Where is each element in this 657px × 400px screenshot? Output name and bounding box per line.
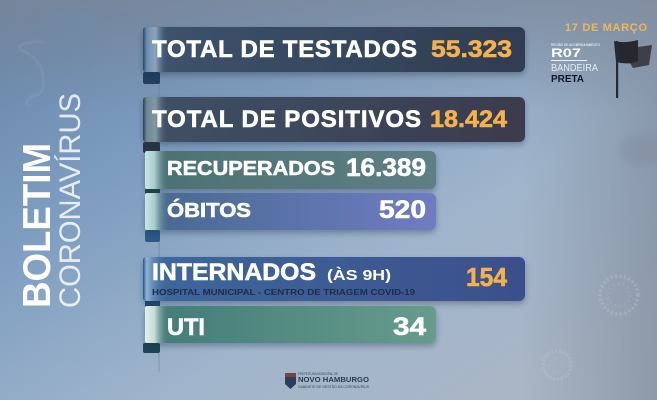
panel: recuperados (145, 151, 436, 195)
panel: internados: (ÀS 9H) (327, 267, 391, 284)
panel: total de testados: 55.323 (431, 36, 512, 63)
side title: Boletim Coronavírus: BOLETIM (16, 143, 59, 308)
panel: uti: UTI (167, 314, 205, 341)
logo: Novo Hamburgo: NOVO HAMBURGO (298, 377, 370, 384)
background virus: upper right (620, 134, 657, 166)
background virus: lower right (543, 276, 638, 379)
panel: óbitos (145, 193, 436, 242)
logo: Novo Hamburgo (285, 372, 370, 389)
panel: óbitos: ÓBITOS (167, 198, 251, 222)
panel: total de positivos (143, 97, 525, 153)
panel: internados: INTERNADOS (152, 259, 316, 286)
icon: black flag (614, 40, 652, 98)
panel: internados: HOSPITAL MUNICIPAL - CENTRO DE TRIAGEM COVID-19 (152, 288, 416, 297)
logo: Novo Hamburgo: PREFEITURA MUNICIPAL DE (298, 372, 339, 376)
background virus: top left (19, 8, 98, 106)
regional status block (551, 42, 600, 85)
regional status block: BANDEIRA (551, 62, 598, 74)
panel: óbitos: 520 (379, 196, 426, 224)
panel: internados: 154 (466, 262, 508, 292)
side title: Boletim Coronavírus (16, 93, 87, 308)
panel: uti (143, 306, 436, 353)
panel: uti: 34 (393, 313, 426, 341)
regional status block: REGIÃO DE ACOMPANHAMENTO (551, 42, 600, 47)
regional status block: R07 (551, 46, 581, 60)
vertical ribbon line (158, 72, 160, 372)
panel: recuperados: 16.389 (346, 154, 426, 182)
side title: Boletim Coronavírus: CORONAVÍRUS (54, 93, 87, 308)
date: 17 DE MARÇO (565, 22, 647, 34)
panel: total de positivos: TOTAL DE POSITIVOS (152, 106, 421, 133)
panel: total de positivos: 18.424 (430, 106, 508, 133)
regional status block: PRETA (551, 73, 584, 85)
panel: internados (143, 257, 525, 308)
logo: Novo Hamburgo: GABINETE DE GESTÃO DA CORONAVÍRUS (298, 384, 369, 389)
panel: total de testados (143, 27, 525, 84)
panel: recuperados: RECUPERADOS (167, 158, 335, 180)
panel: total de testados: TOTAL DE TESTADOS (152, 36, 417, 63)
